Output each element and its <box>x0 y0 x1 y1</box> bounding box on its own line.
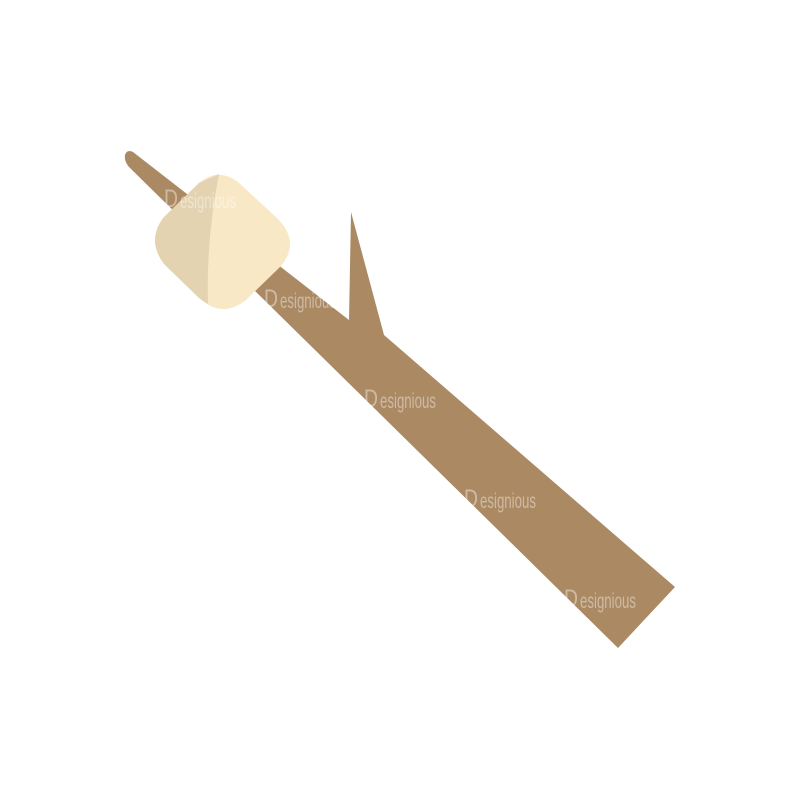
watermark 5: esignious <box>580 590 636 613</box>
watermark 3: esignious <box>380 390 436 413</box>
watermark 4: esignious <box>480 490 536 513</box>
watermark 2: esignious <box>280 290 336 313</box>
watermark 3: D <box>364 385 378 413</box>
marshmallow <box>155 174 290 309</box>
stick with branch <box>125 151 675 648</box>
watermark 2: D <box>264 285 278 313</box>
watermark 5 <box>564 585 636 613</box>
watermark 1 <box>164 185 236 213</box>
watermark 4: D <box>464 485 478 513</box>
marshmallow light body <box>155 175 290 309</box>
watermark 5: D <box>564 585 578 613</box>
watermark 3 <box>364 385 436 413</box>
watermark 4 <box>464 485 536 513</box>
watermark 1: esignious <box>180 190 236 213</box>
watermark 2 <box>264 285 336 313</box>
marshmallow shaded side <box>155 174 219 304</box>
watermark 1: D <box>164 185 178 213</box>
